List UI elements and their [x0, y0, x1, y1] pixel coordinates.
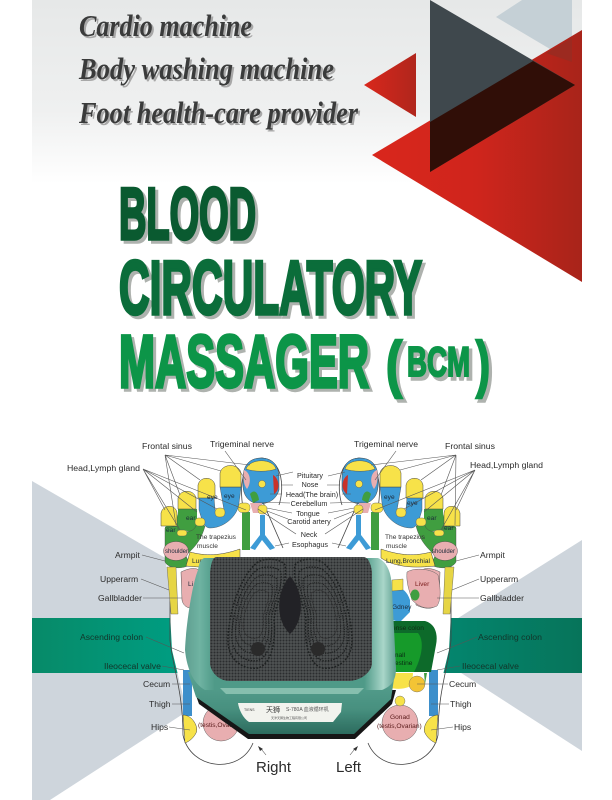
diagram labels: Head(The brain): [286, 490, 338, 499]
top grey gradient panel: [32, 0, 582, 184]
diagram labels: Gdney: [392, 604, 412, 611]
dark centre of foot pattern: [279, 576, 301, 634]
diagram labels: Gallbladder: [98, 593, 142, 603]
diagram labels: Pituitary: [297, 471, 323, 480]
tagline text: Body washing machine: [80, 53, 336, 88]
diagram labels: shoulder: [432, 549, 455, 555]
diagram labels: shoulder: [165, 549, 188, 555]
diagram labels: Ascending colon: [478, 633, 542, 642]
diagram labels: Cerebellum: [291, 499, 327, 508]
diagram labels: The trapezius: [385, 534, 426, 541]
device name plate: 天津天狮生物工程有限公司: [271, 715, 307, 720]
diagram labels: Liver: [415, 581, 430, 588]
diagram labels: Left: [336, 759, 362, 776]
diagram labels: Lung: [192, 558, 207, 565]
footprint acupressure pattern: [228, 559, 352, 668]
diagram labels: Nose: [302, 480, 318, 489]
diagram labels: ear: [166, 527, 176, 534]
diagram labels: Ileocecal valve: [462, 662, 520, 671]
tagline text: Body washing machine: [78, 51, 334, 86]
diagram labels: Hips: [151, 722, 168, 732]
diagram labels: Right: [256, 759, 292, 776]
diagram labels: [67, 439, 543, 776]
diagram labels: Frontal sinus: [142, 441, 192, 451]
tagline text: Foot health-care provider: [78, 95, 359, 130]
diagram labels: Trigeminal nerve: [210, 439, 274, 449]
diagram labels: Cecum: [143, 679, 170, 689]
diagram labels: ear: [186, 515, 196, 522]
diagram labels: ense colon: [392, 625, 424, 632]
diagram labels: Gonad: [390, 714, 410, 721]
diagram labels: muscle: [386, 543, 407, 550]
diagram labels: Tongue: [296, 509, 320, 518]
diagram labels: eye: [224, 493, 235, 500]
main title: BLOOD: [119, 174, 256, 255]
diagram labels: eye: [207, 494, 218, 501]
device lower skirt: [188, 672, 395, 734]
tagline text: Foot health-care provider: [80, 97, 361, 132]
diagram labels: The trapezius: [196, 534, 237, 541]
main title: BCM: [410, 341, 473, 388]
diagram labels: Armpit: [480, 550, 505, 560]
diagram labels: Head,Lymph gland: [470, 460, 543, 470]
diagram labels: (testis,Ovarian): [198, 722, 243, 729]
main title: BLOOD: [122, 177, 259, 258]
main title: MASSAGER: [122, 323, 372, 406]
main title: [119, 174, 493, 406]
main title: MASSAGER: [119, 320, 369, 403]
diagram labels: Cecum: [449, 679, 476, 689]
tagline text: Cardio machine: [81, 10, 254, 45]
device black base: [194, 690, 396, 739]
diagram labels: Hips: [454, 722, 471, 732]
diagram labels: mall: [393, 652, 406, 659]
dark heel spots: [251, 642, 325, 656]
diagram labels: Upperarm: [480, 574, 518, 584]
foot reflexology diagram: [67, 439, 543, 776]
diagram labels: eye: [384, 494, 395, 501]
diagram labels: testine: [393, 660, 413, 667]
diagram labels: Head,Lymph gland: [67, 463, 140, 473]
device body ridge highlight: [220, 688, 364, 694]
main title: ): [479, 333, 493, 402]
diagram labels: Thigh: [149, 699, 171, 709]
device name plate: S-780A 血液循环机: [286, 706, 329, 713]
diagram labels: ear: [444, 525, 454, 532]
device name plate: 天狮: [266, 706, 280, 714]
left foot chart: [321, 458, 460, 764]
diagram labels: Armpit: [115, 550, 140, 560]
main title: ): [476, 330, 490, 399]
device name plate: [238, 703, 342, 722]
main title: (: [386, 330, 402, 399]
tagline text: [78, 8, 361, 132]
device name plate: TIENS: [244, 708, 255, 712]
diagram labels: Lung,Bronchial: [386, 558, 431, 565]
diagram labels: eye: [407, 500, 418, 507]
main title: BCM: [407, 338, 470, 385]
grey background shapes: [32, 481, 582, 800]
diagram labels: muscle: [197, 543, 218, 550]
diagram labels: Trigeminal nerve: [354, 439, 418, 449]
diagram labels: Thigh: [450, 699, 472, 709]
main title: (: [389, 333, 405, 402]
diagram labels: (testis,Ovarian): [377, 723, 422, 730]
diagram labels: Esophagus: [292, 540, 328, 549]
decorative red and slate triangles: [364, 0, 582, 282]
diagram labels: Gallbladder: [480, 593, 524, 603]
diagram labels: Ileocecal valve: [104, 662, 162, 671]
internal organs of left foot chart: [390, 569, 440, 706]
tagline text: Cardio machine: [79, 8, 252, 43]
teal band: [32, 618, 582, 673]
leader lines: [141, 451, 479, 755]
massager device: [185, 557, 396, 739]
diagram labels: Carotid artery: [287, 517, 331, 526]
diagram labels: Ascending colon: [80, 633, 143, 642]
rubber massage mat: [210, 557, 372, 681]
small arrows: [258, 746, 358, 751]
diagram labels: ear: [427, 515, 437, 522]
right foot chart: [161, 458, 300, 764]
diagram labels: Frontal sinus: [445, 441, 495, 451]
diagram labels: Li: [188, 581, 194, 588]
diagram labels: Upperarm: [100, 574, 138, 584]
device upper body: [185, 558, 396, 690]
diagram labels: Neck: [301, 530, 318, 539]
